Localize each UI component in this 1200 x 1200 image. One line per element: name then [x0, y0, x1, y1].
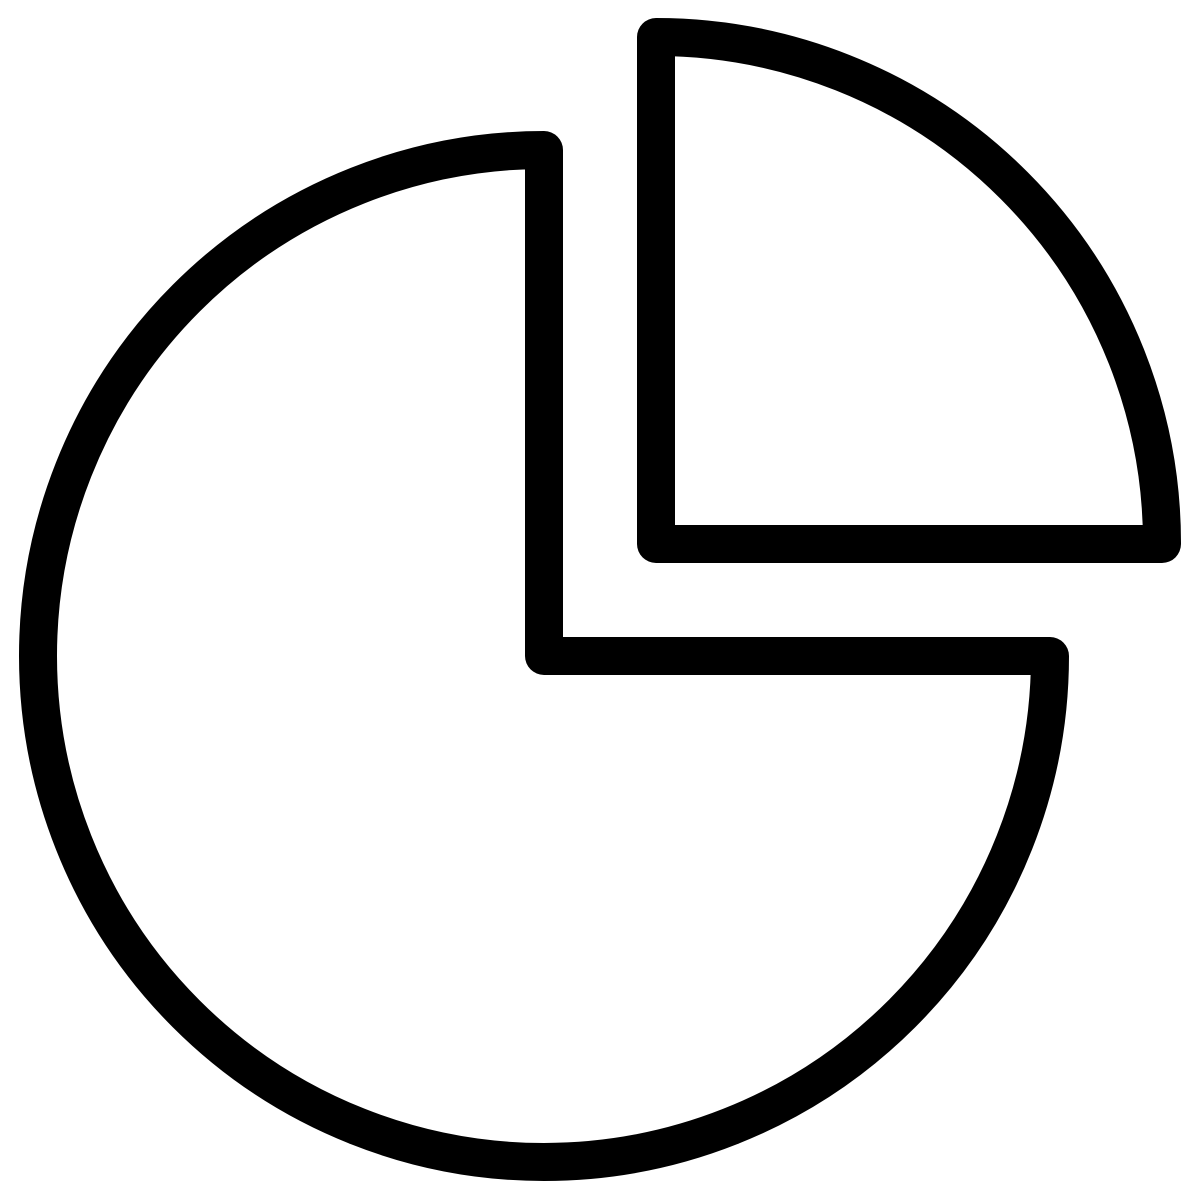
pie chart main body with missing quarter [38, 150, 1050, 1162]
detached pie slice [656, 37, 1162, 544]
